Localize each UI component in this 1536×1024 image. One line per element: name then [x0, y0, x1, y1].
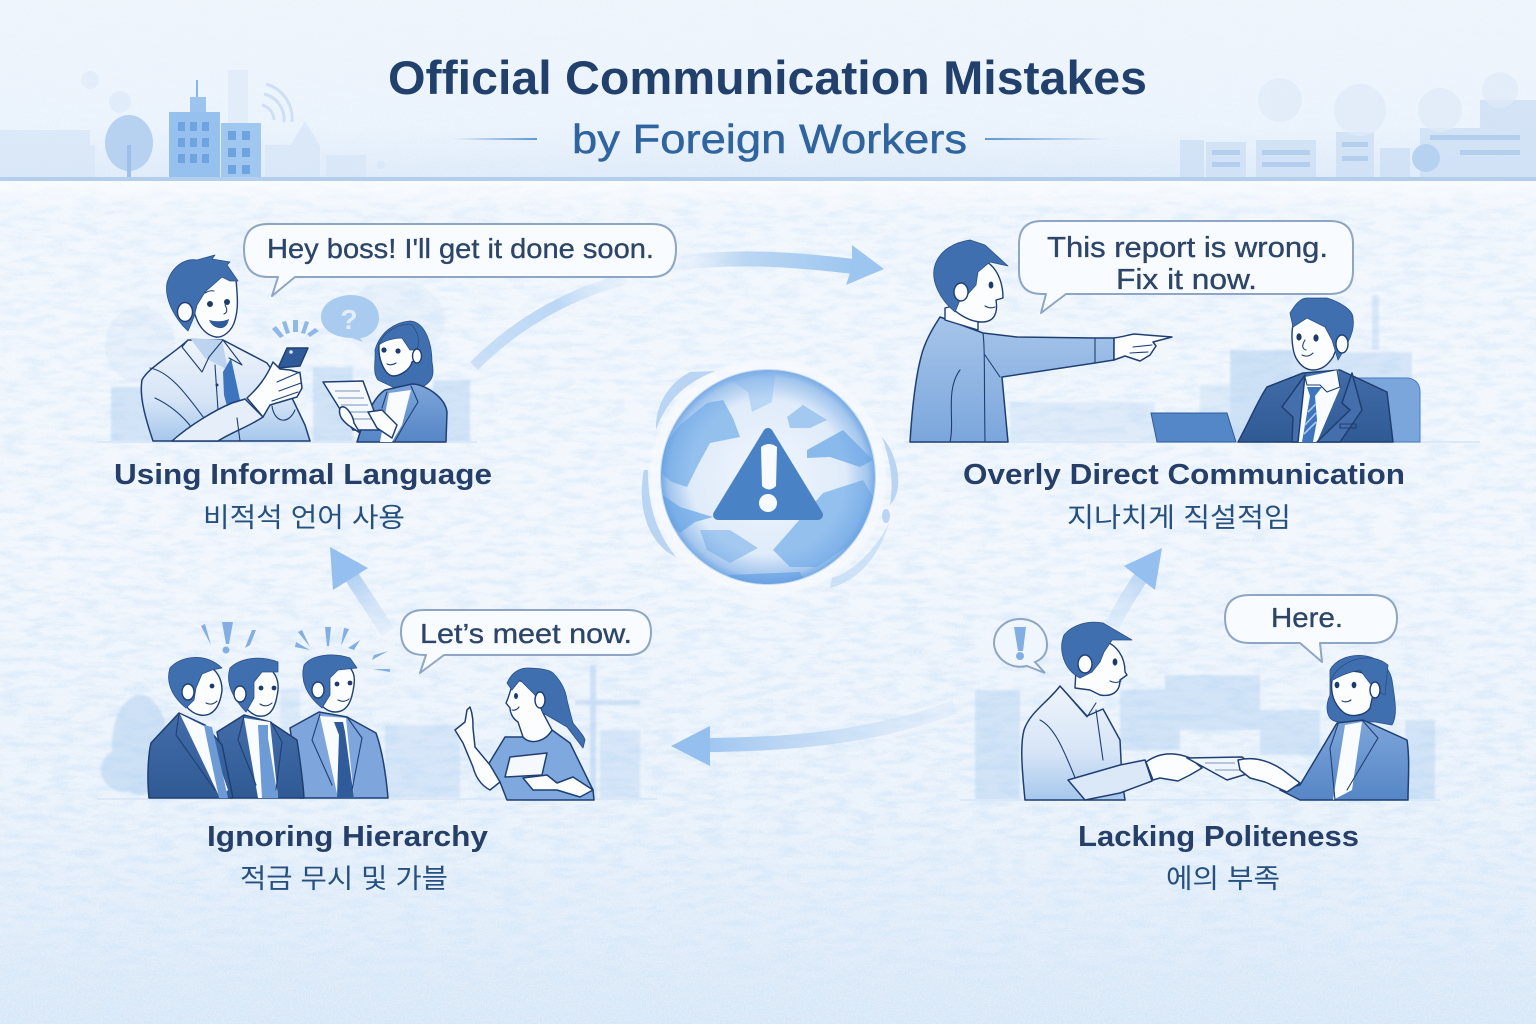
- heading: lacking politeness: [1078, 821, 1359, 894]
- speech bubble: Fix it now.: [1116, 264, 1257, 296]
- chair: [1345, 378, 1420, 442]
- laptop: [1151, 413, 1236, 442]
- shirt torso: [141, 340, 310, 441]
- boss at desk: [1238, 298, 1393, 442]
- woman with document: [323, 321, 447, 442]
- heading: ignoring hierarchy: [207, 821, 488, 894]
- paper handoff: [1187, 757, 1260, 780]
- woman pointing up: [455, 668, 594, 800]
- arrow: left, hierarchy to informal: [330, 547, 388, 632]
- man with phone: [141, 255, 310, 441]
- speech bubble: Let’s meet now.: [420, 618, 632, 649]
- heading: overly direct communication: Overly Direct Communication: [963, 459, 1405, 491]
- scene backdrop buildings: [105, 280, 470, 442]
- heading: ignoring hierarchy: 적금 무시 및 가블: [240, 864, 448, 894]
- scene backdrop buildings: [1010, 295, 1412, 442]
- speech bubble: This report is wrong.: [1047, 232, 1328, 264]
- skyline: right city: [1180, 72, 1536, 180]
- heading: using informal language: Using Informal Language: [114, 459, 492, 491]
- heading: lacking politeness: 에의 부족: [1166, 864, 1280, 894]
- center globe with warning icon: [642, 359, 898, 595]
- heading: overly direct communication: [963, 459, 1405, 533]
- exclamation bubble: [994, 619, 1047, 673]
- heading: overly direct communication: 지나치게 직설적임: [1067, 503, 1291, 533]
- speech bubble: Hey boss! I'll get it done soon.: [267, 233, 654, 264]
- speech bubble: [244, 224, 676, 296]
- hand: [247, 362, 302, 417]
- panel: ignoring hierarchy: [97, 610, 657, 800]
- heading: ignoring hierarchy: Ignoring Hierarchy: [207, 821, 488, 853]
- arrow: top, informal to direct: [474, 245, 884, 366]
- question bubble: ?: [340, 304, 358, 335]
- orbit swooshes: [642, 371, 898, 588]
- skyline: left city: [0, 70, 385, 180]
- heading: lacking politeness: Lacking Politeness: [1078, 821, 1359, 853]
- arrow: bottom, politeness to hierarchy: [671, 707, 955, 766]
- arrow: right, politeness to direct: [1112, 548, 1162, 626]
- panel: lacking politeness: [960, 595, 1440, 801]
- colleague three: [290, 655, 388, 798]
- man handing paper: [1022, 622, 1202, 800]
- speech bubble: Here.: [1271, 602, 1343, 633]
- scene backdrop buildings: [975, 675, 1435, 800]
- speech bubble: [1019, 221, 1353, 313]
- attention rays: [272, 320, 319, 338]
- pointing man: [910, 240, 1172, 442]
- scene backdrop buildings: [101, 665, 640, 798]
- heading: using informal language: 비적석 언어 사용: [203, 503, 405, 533]
- colleague two: [217, 658, 304, 798]
- panel: using informal language: [97, 224, 676, 443]
- head: [192, 276, 237, 337]
- colleague one: [148, 657, 233, 798]
- heading: using informal language: [114, 459, 492, 533]
- title: Official Communication Mistakes: [388, 51, 1147, 104]
- woman receiving: [1238, 655, 1409, 800]
- speech bubble: [1225, 595, 1397, 662]
- panel: overly direct communication: [905, 221, 1480, 443]
- forearm and cuff: [172, 399, 263, 441]
- continents: [660, 370, 875, 592]
- subtitle: by Foreign Workers: [572, 116, 967, 162]
- header band with skyline: [0, 0, 1536, 211]
- alert marks over group: [201, 622, 390, 672]
- warning triangle: [718, 433, 818, 515]
- phone: [278, 348, 308, 368]
- speech bubble: [401, 610, 651, 673]
- question bubble: [321, 295, 379, 342]
